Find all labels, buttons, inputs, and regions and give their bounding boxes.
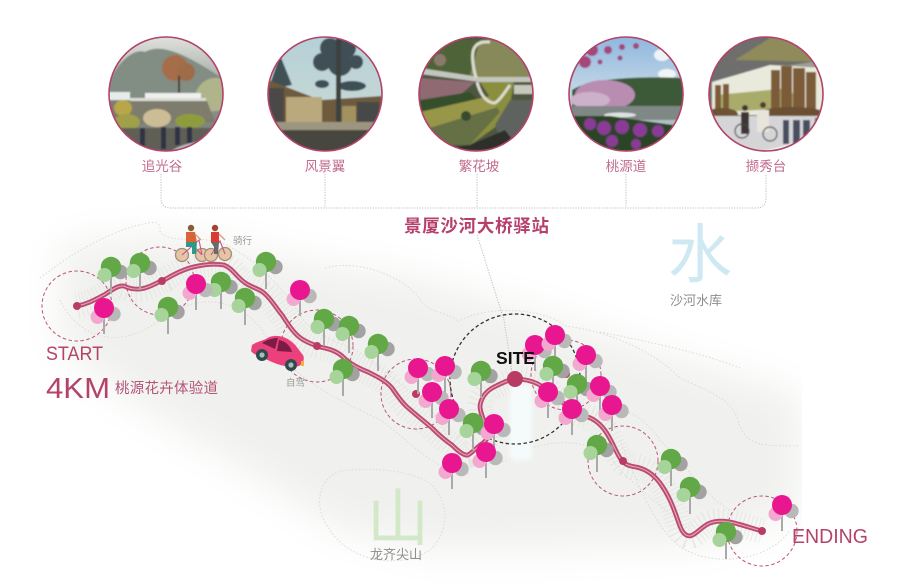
photo: 追光谷 [105, 35, 227, 155]
photo captions: 桃源道 [606, 159, 646, 174]
trail name: 桃源花卉体验道 [115, 380, 218, 397]
photo: 繁花坡 [415, 35, 537, 153]
white bridge corridor [510, 385, 532, 460]
dashed zones [42, 247, 797, 566]
ENDING label: ENDING [792, 526, 868, 548]
cycling label: 骑行 [233, 235, 253, 247]
SITE label: SITE [496, 348, 535, 368]
mountain glyph: 山 [367, 485, 429, 554]
photo captions [142, 159, 786, 174]
icon: tandem bicycle [176, 225, 232, 262]
photo captions: 撷秀台 [746, 159, 786, 174]
photo: 风景翼 [265, 35, 385, 154]
photo: 撷秀台 [705, 35, 827, 153]
map wash [60, 235, 842, 570]
photo captions: 繁花坡 [459, 159, 500, 174]
site node [507, 371, 523, 387]
fine texture along route [77, 264, 762, 536]
4KM figure: 4KM [46, 373, 110, 405]
photo captions: 风景翼 [305, 159, 345, 174]
dotted connector bracket [161, 174, 766, 372]
map contour lines [40, 222, 800, 561]
mountain label: 龙齐尖山 [370, 547, 422, 562]
route: 4 km trail [77, 264, 762, 536]
reservoir label: 沙河水库 [670, 293, 722, 308]
heading: station name: 景厦沙河大桥驿站 [404, 216, 549, 236]
photo captions: 追光谷 [142, 159, 183, 174]
driving label: 自驾 [286, 377, 305, 389]
site circle [450, 314, 580, 444]
route nodes [73, 277, 766, 535]
trees along the route [90, 252, 799, 559]
icon: pink car [251, 336, 304, 371]
START label: START [46, 343, 103, 365]
water glyph: 水 [668, 219, 732, 291]
photo: 桃源道 [565, 35, 687, 153]
